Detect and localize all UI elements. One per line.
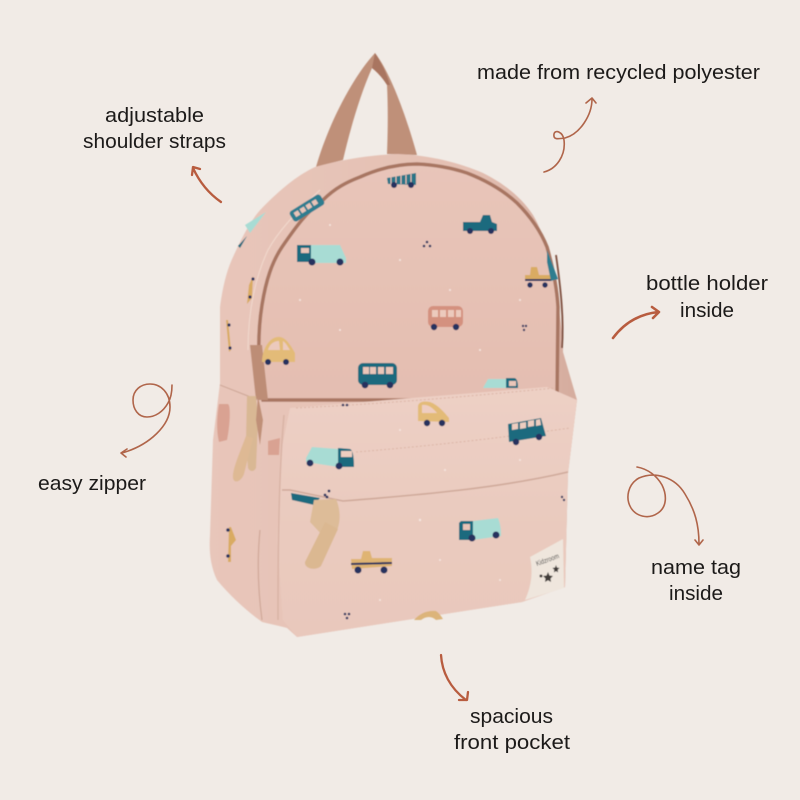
dots — [324, 241, 565, 619]
front panel with brown piping — [259, 164, 558, 400]
label: adjustable shoulder straps: adjustable — [105, 104, 204, 127]
truck 1 — [297, 245, 346, 266]
arrow: bottle holder — [613, 307, 659, 338]
striped bus, top — [387, 173, 416, 188]
white specks — [299, 224, 521, 601]
arrow: shoulder straps — [192, 167, 221, 202]
zipper pull: front pocket — [305, 499, 340, 569]
backpack — [210, 53, 577, 637]
label: adjustable shoulder straps — [83, 104, 226, 153]
zipper tape — [250, 345, 268, 400]
bus on flap — [289, 193, 325, 223]
label: bottle holder inside — [646, 272, 768, 322]
teal bus pocket — [508, 418, 546, 445]
print: vehicles — [217, 173, 565, 620]
front pocket — [277, 387, 577, 637]
yellow car — [262, 337, 295, 365]
yellow pickup right — [525, 250, 558, 288]
name tag: Kidzroom — [535, 553, 560, 568]
arrow: recycled polyester — [544, 98, 596, 172]
label: bottle holder inside: bottle holder — [646, 272, 768, 295]
name tag — [525, 539, 564, 600]
side prints — [217, 404, 280, 455]
yellow car bottom — [414, 611, 443, 620]
label: made from recycled polyester: made from recycled polyester — [477, 61, 760, 84]
teal pickup — [463, 215, 497, 234]
side seam — [220, 385, 262, 620]
arrow: front pocket — [441, 655, 468, 700]
teal bus — [358, 363, 397, 388]
yellow car pocket — [418, 401, 449, 426]
handle — [316, 53, 417, 167]
label: spacious front pocket: front pocket — [454, 731, 570, 754]
label: name tag inside: inside — [669, 582, 723, 605]
navy strip under flap — [291, 493, 320, 505]
mint truck lower — [459, 518, 501, 542]
label: adjustable shoulder straps: shoulder straps — [83, 130, 226, 153]
backpack body — [210, 154, 577, 637]
label: name tag inside: name tag — [651, 556, 741, 579]
arrow: easy zipper — [121, 384, 172, 457]
label: spacious front pocket — [454, 705, 570, 754]
label: bottle holder inside: inside — [680, 299, 734, 322]
arrow: name tag — [628, 467, 703, 545]
mint truck pocket — [306, 447, 354, 469]
label: easy zipper: easy zipper — [38, 472, 146, 495]
label: name tag inside — [651, 556, 741, 605]
mint truck behind pocket — [483, 378, 518, 388]
zipper pull: main compartment — [233, 396, 263, 481]
yellow pickup lower — [351, 551, 392, 574]
flap seam — [248, 190, 320, 350]
label: spacious front pocket: spacious — [470, 705, 553, 728]
right edge seam — [556, 255, 563, 348]
pink bus — [428, 306, 463, 330]
